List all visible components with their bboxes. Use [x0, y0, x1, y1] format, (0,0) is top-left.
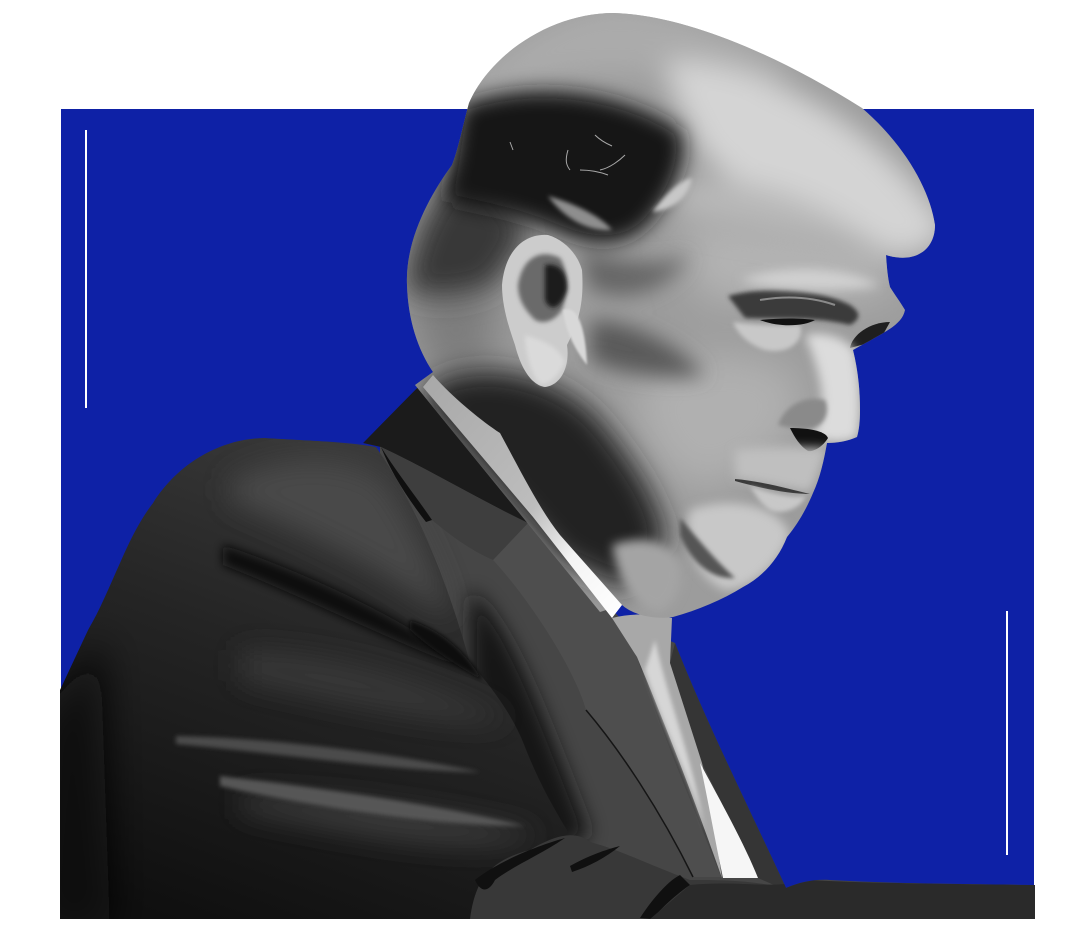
- sleeve light fold upper: [176, 736, 480, 772]
- blue background panel: [61, 109, 1034, 919]
- upper collar: [384, 452, 504, 552]
- collar shadow: [381, 447, 432, 522]
- mouth line: [735, 479, 810, 494]
- sleeve: [60, 438, 580, 919]
- lower sleeve highlight: [240, 795, 540, 845]
- hair strands: [510, 135, 625, 175]
- forehead: [680, 220, 890, 300]
- back hair shadow: [405, 160, 530, 297]
- eye socket: [760, 318, 815, 325]
- brow shadow: [728, 290, 858, 325]
- nose wing: [778, 399, 827, 429]
- sleeve light fold lower: [220, 776, 525, 826]
- lapel edge: [586, 710, 693, 877]
- vertical rule: bottom right: [1006, 611, 1008, 855]
- sleeve seam fold: [410, 620, 482, 680]
- dark side hair: [445, 91, 683, 242]
- necktie: [612, 615, 722, 878]
- under-eye bag: [733, 322, 801, 351]
- head and hair: [400, 0, 950, 630]
- back of head: [405, 290, 500, 375]
- hair lower sweep: [675, 170, 797, 231]
- upper wedge: [363, 385, 528, 523]
- shirt front: [700, 763, 758, 878]
- jowl: [687, 503, 790, 590]
- nose: [805, 334, 860, 442]
- mid sleeve highlight: [240, 650, 510, 722]
- nostril: [790, 428, 828, 451]
- far-left shadow: [60, 644, 113, 868]
- sleeve dark fold: [223, 545, 470, 670]
- jowl crease: [680, 518, 735, 578]
- temple shadow: [580, 250, 690, 295]
- hand creases: [475, 838, 690, 919]
- shirt collar: [423, 375, 622, 618]
- shoulder highlight: [230, 459, 450, 620]
- torso base: [380, 446, 1029, 888]
- neck shadow: [420, 371, 665, 590]
- upper lip: [735, 447, 827, 492]
- tie highlight: [645, 640, 705, 830]
- hair lit tuft: [548, 196, 612, 230]
- hand and cuff: [470, 835, 765, 919]
- brow highlights: [760, 298, 835, 305]
- hair light sweep: [667, 60, 950, 256]
- hair crown: [450, 5, 800, 110]
- jacket: [40, 385, 1040, 930]
- ear: [502, 235, 587, 387]
- vertical rule: top left: [85, 130, 87, 408]
- cheek light: [638, 354, 802, 490]
- right jacket front: [670, 643, 790, 892]
- lower lapel: [493, 523, 721, 877]
- upper cheek shadow: [590, 320, 705, 377]
- far eye: [850, 322, 890, 348]
- brow ridge light: [740, 269, 880, 290]
- right sleeve: [650, 880, 1035, 919]
- neck wattle: [612, 540, 681, 612]
- lower lip: [750, 486, 806, 512]
- hair front tuft: [652, 178, 692, 212]
- torso dark band beside sleeve seam: [470, 590, 590, 860]
